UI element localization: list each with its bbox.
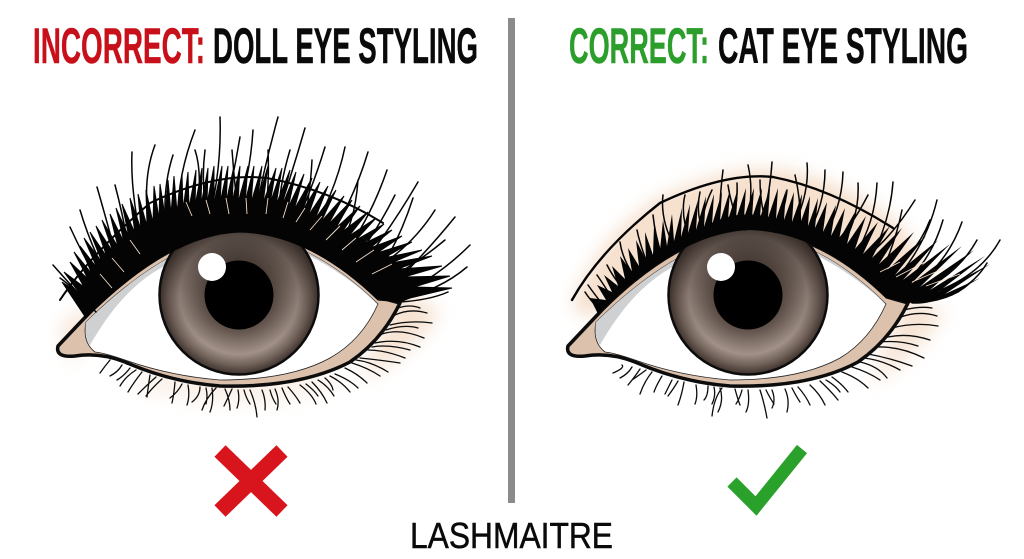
upper long lashes [53, 117, 470, 312]
eye rim and tear duct [568, 230, 908, 386]
beige gaps between lashes [100, 198, 392, 288]
lid skin behind lashes [95, 190, 395, 300]
beige gaps between lashes [880, 262, 960, 286]
illustration: doll eye [53, 117, 470, 417]
eye highlight [198, 253, 226, 281]
sclera [85, 234, 378, 380]
sclera [595, 234, 886, 380]
eye highlight [707, 253, 735, 281]
crease line [60, 177, 383, 300]
sclera shadow [86, 234, 378, 345]
lower lashes [613, 307, 938, 418]
eyelid skin and glow [572, 169, 930, 320]
crease line [572, 176, 893, 300]
upper lash mass [590, 188, 990, 314]
center divider [508, 18, 515, 503]
illustration: cat eye [568, 162, 1000, 418]
brand name: LASHMAITRE [410, 515, 613, 556]
corner glow [870, 300, 945, 385]
lower lashes [100, 306, 432, 417]
heading: incorrect doll eye styling: DOLL EYE STYLING [213, 18, 478, 74]
pupil [714, 260, 782, 330]
iris [668, 216, 828, 374]
heading: correct cat eye styling: CORRECT: [569, 18, 709, 74]
heading: correct cat eye styling [569, 18, 968, 74]
upper long lashes [585, 162, 1000, 310]
icon: red cross [220, 451, 282, 511]
heading: incorrect doll eye styling [33, 18, 478, 74]
icon: green check [732, 449, 802, 506]
heading: incorrect doll eye styling: INCORRECT: [33, 18, 205, 74]
eye rim and tear duct [58, 232, 400, 386]
eyelid shade [590, 179, 893, 300]
sclera shadow [596, 234, 886, 345]
skin glow [60, 290, 440, 402]
upper lash mass [62, 166, 452, 318]
iris [160, 216, 318, 374]
pupil [204, 260, 274, 330]
